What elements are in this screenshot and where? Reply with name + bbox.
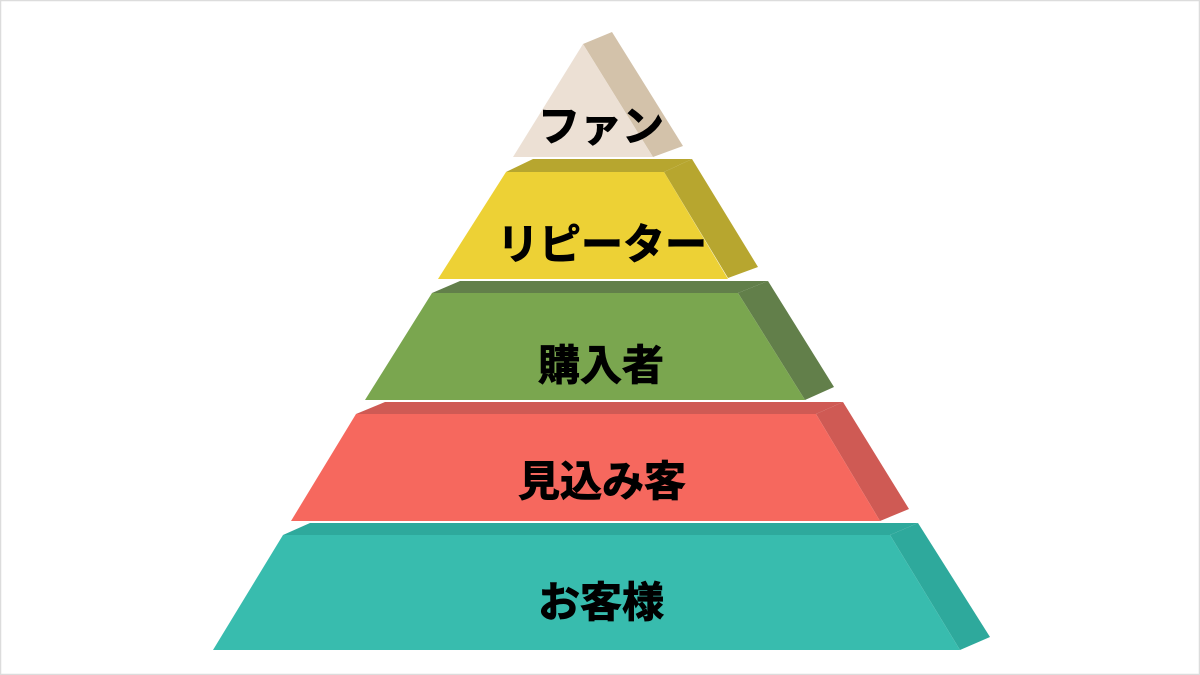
tier 5: お客様: お客様	[538, 579, 664, 626]
tier 3: 購入者: 購入者	[538, 342, 664, 389]
tier 2: リピーター: リピーター	[497, 221, 707, 268]
tier 3: 購入者	[365, 281, 834, 400]
tier 5: お客様	[213, 523, 990, 650]
tier 4: 見込み客: 見込み客	[518, 458, 686, 505]
tier 1: ファン	[513, 32, 683, 157]
tier 1: ファン: ファン	[538, 103, 664, 150]
tier 4: 見込み客	[291, 402, 909, 521]
tier 2: リピーター	[438, 159, 758, 279]
